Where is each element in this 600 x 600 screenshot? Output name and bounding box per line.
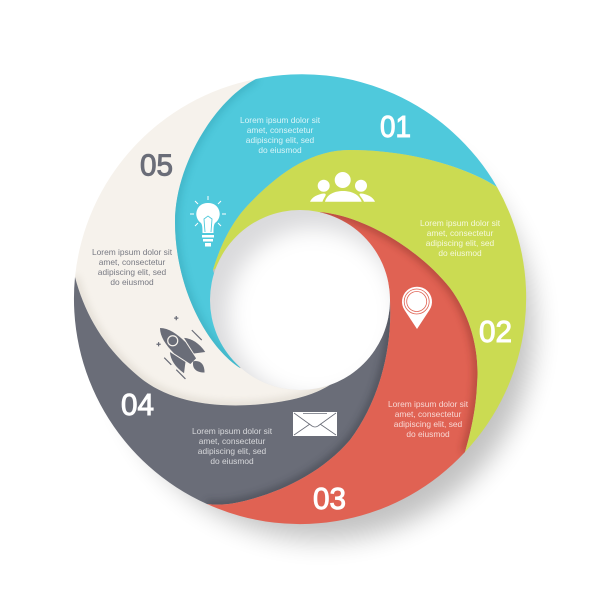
text block 05: do eiusmod	[110, 277, 154, 287]
text block 03: do eiusmod	[406, 429, 450, 439]
panel: 02 green segment	[213, 150, 526, 452]
number 02: 02	[479, 314, 512, 349]
number 01: 01	[380, 109, 411, 144]
icon: envelope	[293, 412, 337, 436]
text block 02: adipiscing elit, sed	[426, 238, 495, 248]
text block 04: amet, consectetur	[199, 436, 265, 446]
panel: 04 gray segment	[74, 277, 390, 505]
text block 04: adipiscing elit, sed	[198, 446, 267, 456]
text block 03: adipiscing elit, sed	[394, 419, 463, 429]
panel: 05 cream segment	[75, 79, 336, 405]
ring drop shadow	[110, 116, 534, 540]
text block 04: Lorem ipsum dolor sit	[192, 426, 273, 436]
text block 05: amet, consectetur	[99, 257, 165, 267]
text block 04: do eiusmod	[210, 456, 254, 466]
number 04: 04	[121, 387, 154, 422]
text block 02: amet, consectetur	[427, 228, 493, 238]
text block 05: Lorem ipsum dolor sit	[92, 247, 173, 257]
number 03: 03	[313, 481, 346, 516]
centre hole	[210, 210, 390, 390]
icon: people	[310, 172, 375, 202]
text block 03: Lorem ipsum dolor sit	[388, 399, 469, 409]
icon: map pin	[402, 287, 432, 329]
text block 03: amet, consectetur	[395, 409, 461, 419]
text block 01: amet, consectetur	[247, 125, 313, 135]
text block 02: do eiusmod	[438, 248, 482, 258]
icon: rocket	[147, 313, 219, 385]
panel: 03 red segment	[207, 212, 478, 524]
text block 01: Lorem ipsum dolor sit	[240, 115, 321, 125]
text block 02: Lorem ipsum dolor sit	[420, 218, 501, 228]
icon: light bulb	[190, 196, 226, 246]
number 05: 05	[140, 148, 173, 182]
panel: 01 blue segment	[175, 74, 497, 368]
text block 05: adipiscing elit, sed	[98, 267, 167, 277]
text block 01: do eiusmod	[258, 145, 302, 155]
text block 01: adipiscing elit, sed	[246, 135, 315, 145]
